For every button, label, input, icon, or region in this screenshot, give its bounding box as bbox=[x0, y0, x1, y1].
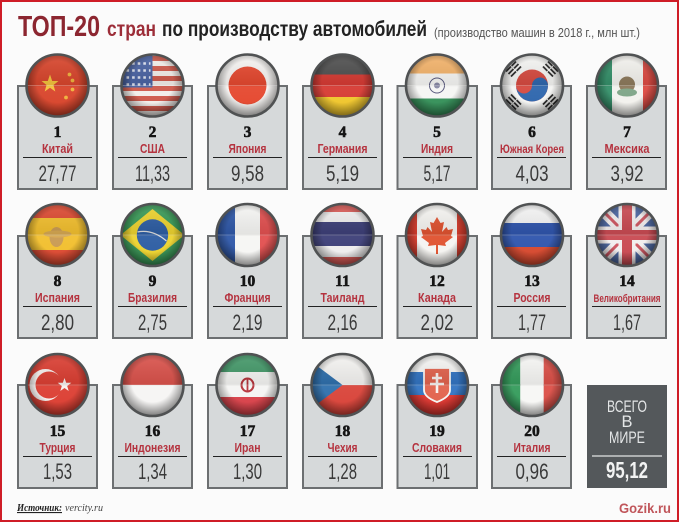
card: Чехия bbox=[303, 353, 382, 488]
card: Япония: 3 bbox=[244, 124, 252, 141]
flag: Germany bbox=[310, 54, 374, 118]
card: Индия: 5 bbox=[433, 124, 441, 141]
card: США: США bbox=[140, 142, 165, 156]
card: Иран: Иран bbox=[234, 441, 260, 455]
flag: Iran bbox=[216, 353, 280, 417]
card: Мексика: 3,92 bbox=[610, 161, 644, 186]
source: Источник: bbox=[16, 502, 62, 514]
card: Япония: 9,58 bbox=[231, 161, 264, 186]
card: Южная Корея: 4,03 bbox=[516, 161, 548, 186]
card: Иран: 1,30 bbox=[233, 459, 262, 484]
card: Франция: Франция bbox=[224, 291, 270, 305]
card: Таиланд: 11 bbox=[335, 273, 350, 290]
total panel: 95,12 bbox=[606, 457, 648, 483]
card: Чехия: 1,28 bbox=[328, 459, 357, 484]
card: Франция: 2,19 bbox=[232, 310, 262, 335]
title: стран bbox=[107, 18, 156, 41]
card: Испания: Испания bbox=[35, 291, 80, 305]
source: vercity.ru bbox=[65, 502, 103, 514]
card: Италия bbox=[492, 353, 571, 488]
flag: Turkey bbox=[26, 353, 90, 417]
card: Канада: Канада bbox=[418, 291, 457, 305]
card: Великобритания bbox=[587, 203, 666, 338]
title: ТОП-20 bbox=[18, 11, 100, 43]
flag: Thailand bbox=[310, 203, 374, 267]
card: Чехия: 18 bbox=[335, 423, 350, 440]
card: Таиланд bbox=[303, 203, 382, 338]
card: США bbox=[113, 54, 192, 189]
card: Испания bbox=[18, 203, 97, 338]
card: Таиланд: 2,16 bbox=[328, 310, 358, 335]
card: Россия: Россия bbox=[514, 291, 550, 305]
card: Италия: 0,96 bbox=[516, 459, 548, 484]
card: Россия: 13 bbox=[524, 273, 540, 290]
card: Мексика: 7 bbox=[623, 124, 631, 141]
card: Иран bbox=[208, 353, 287, 488]
card: Южная Корея: Южная Корея bbox=[500, 144, 564, 156]
total panel: ВСЕГО bbox=[607, 398, 647, 416]
flag: United Kingdom bbox=[595, 203, 659, 267]
flag: South Korea bbox=[500, 54, 564, 118]
card: Индия: 5,17 bbox=[424, 161, 450, 186]
card: Япония: Япония bbox=[228, 142, 266, 156]
card: Словакия: 1,01 bbox=[424, 459, 450, 484]
card: Турция: 1,53 bbox=[43, 459, 72, 484]
flag: India bbox=[405, 54, 469, 118]
card: США: 2 bbox=[149, 124, 157, 141]
card: Китай: 27,77 bbox=[38, 161, 76, 186]
card: Индонезия: 1,34 bbox=[138, 459, 167, 484]
card: Россия: 1,77 bbox=[518, 310, 546, 335]
total panel: В bbox=[621, 413, 633, 431]
flag: Mexico bbox=[595, 54, 659, 118]
card: Германия: 4 bbox=[339, 124, 347, 141]
flag: Brazil bbox=[120, 203, 184, 267]
total panel bbox=[587, 385, 667, 488]
title bbox=[18, 11, 640, 43]
card: Франция bbox=[208, 203, 287, 338]
card: Индия bbox=[398, 54, 477, 189]
card: Германия bbox=[303, 54, 382, 189]
card: Бразилия: 9 bbox=[149, 273, 157, 290]
card: Япония bbox=[208, 54, 287, 189]
total panel: МИРЕ bbox=[609, 429, 645, 447]
card: Германия: Германия bbox=[318, 142, 368, 156]
card: Индонезия: 16 bbox=[145, 423, 160, 440]
card: Турция: 15 bbox=[50, 423, 66, 440]
card: Великобритания: 1,67 bbox=[613, 310, 641, 335]
card: Индонезия bbox=[113, 353, 192, 488]
flag: Japan bbox=[216, 54, 280, 118]
card: Индонезия: Индонезия bbox=[124, 441, 180, 455]
card: Бразилия: 2,75 bbox=[138, 310, 167, 335]
card: Словакия bbox=[398, 353, 477, 488]
card: Бразилия bbox=[113, 203, 192, 338]
flag: France bbox=[216, 203, 280, 267]
card: Канада: 2,02 bbox=[420, 310, 454, 335]
card: Италия: 20 bbox=[524, 423, 540, 440]
card: Канада: 12 bbox=[429, 273, 445, 290]
card: Индия: Индия bbox=[421, 142, 453, 156]
flag: Spain bbox=[26, 203, 90, 267]
flag: Canada bbox=[405, 203, 469, 267]
card: Великобритания: 14 bbox=[619, 273, 635, 290]
card: Южная Корея bbox=[492, 54, 571, 189]
card: Китай bbox=[18, 54, 97, 189]
card: США: 11,33 bbox=[135, 161, 170, 186]
card: Мексика: Мексика bbox=[604, 142, 650, 156]
card: Германия: 5,19 bbox=[326, 161, 359, 186]
card: Словакия: Словакия bbox=[412, 441, 462, 455]
title: по производству автомобилей bbox=[162, 18, 427, 41]
card: Россия bbox=[492, 203, 571, 338]
flag: Russia bbox=[500, 203, 564, 267]
watermark: Gozik.ru bbox=[619, 501, 671, 516]
card: Франция: 10 bbox=[240, 273, 256, 290]
card: Турция bbox=[18, 353, 97, 488]
card: Таиланд: Таиланд bbox=[320, 291, 365, 305]
card: Испания: 2,80 bbox=[41, 310, 74, 335]
flag: Indonesia bbox=[120, 353, 184, 417]
source bbox=[16, 502, 103, 514]
flag: USA bbox=[120, 54, 184, 118]
flag: Slovakia bbox=[405, 353, 469, 417]
flag: Italy bbox=[500, 353, 564, 417]
card: Южная Корея: 6 bbox=[528, 124, 536, 141]
card: Иран: 17 bbox=[240, 423, 256, 440]
title: (производство машин в 2018 г., млн шт.) bbox=[434, 25, 640, 40]
card: Испания: 8 bbox=[54, 273, 62, 290]
card: Италия: Италия bbox=[514, 441, 550, 455]
card: Китай: 1 bbox=[54, 124, 61, 141]
card: Чехия: Чехия bbox=[328, 441, 358, 455]
card: Турция: Турция bbox=[40, 441, 76, 455]
flag: China bbox=[26, 54, 90, 118]
card: Китай: Китай bbox=[42, 142, 73, 156]
card: Словакия: 19 bbox=[429, 423, 445, 440]
card: Мексика bbox=[587, 54, 666, 189]
card: Канада bbox=[398, 203, 477, 338]
card: Бразилия: Бразилия bbox=[128, 291, 177, 305]
flag: Czech Republic bbox=[310, 353, 374, 417]
